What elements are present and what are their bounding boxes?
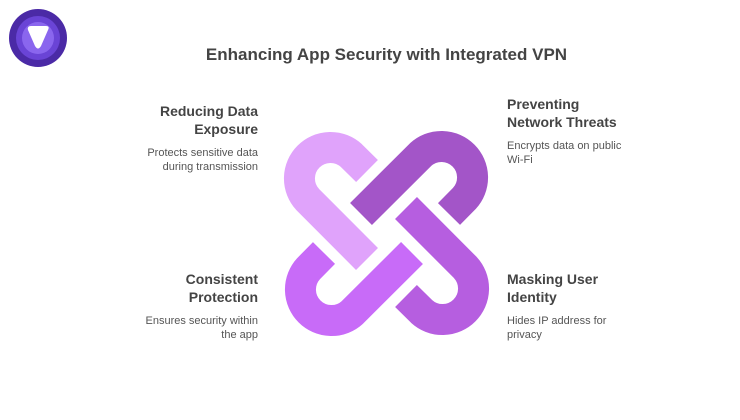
text: Protects sensitive data <box>147 147 258 159</box>
text: during transmission <box>163 161 258 173</box>
text: Reducing Data <box>160 103 258 119</box>
text: privacy <box>507 329 542 341</box>
text: Protection <box>189 289 258 305</box>
text: Masking User <box>507 271 598 287</box>
text: Consistent <box>186 271 258 287</box>
text: Reducing Data Exposure <box>147 103 258 173</box>
link: bottom-right <box>406 208 474 320</box>
logo <box>9 9 67 67</box>
text: Masking User Identity <box>507 271 606 341</box>
text: Wi-Fi <box>507 154 533 166</box>
text: Network Threats <box>507 114 617 130</box>
text: Ensures security within <box>146 315 258 327</box>
text: Preventing Network Threats <box>507 96 621 166</box>
text: Exposure <box>194 121 258 137</box>
text: Encrypts data on public <box>507 140 621 152</box>
text: Consistent Protection <box>146 271 258 341</box>
text: Identity <box>507 289 557 305</box>
text: Hides IP address for <box>507 315 606 327</box>
text: Preventing <box>507 96 579 112</box>
link: bottom-left <box>300 253 412 321</box>
title: Enhancing App Security with Integrated VPN <box>206 45 567 64</box>
text: the app <box>221 329 258 341</box>
link: top-right <box>361 146 473 214</box>
link: top-left <box>299 147 367 259</box>
